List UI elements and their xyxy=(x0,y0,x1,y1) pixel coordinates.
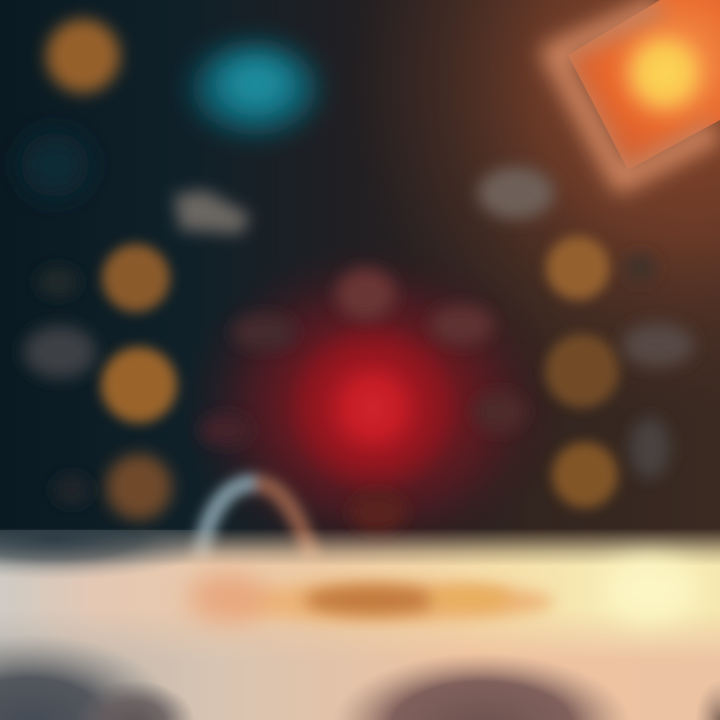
icon: top-left orange circle xyxy=(46,19,120,93)
streak left blob xyxy=(188,574,268,622)
text block: left label 3 xyxy=(54,476,90,504)
text block: right label 2 xyxy=(622,323,694,367)
diamond ring xyxy=(554,6,716,180)
ground lower body xyxy=(0,610,720,720)
central red burst xyxy=(200,268,526,532)
text block: right label 3 xyxy=(630,418,670,478)
diamond fill xyxy=(568,0,720,170)
icon: right circle 1 xyxy=(546,236,610,300)
ground upper body xyxy=(0,530,720,658)
icon: left circle 1 xyxy=(102,244,170,312)
icon: top teal circle xyxy=(193,42,317,134)
left grey cloud xyxy=(0,630,182,720)
orange streak on ground xyxy=(188,574,555,622)
icon: left circle 3 xyxy=(106,454,172,520)
text block: left label 1 xyxy=(38,268,78,296)
burst petals xyxy=(200,268,526,532)
right column: orange circles and labels xyxy=(545,236,694,508)
icon: right circle 2 xyxy=(545,334,619,408)
streak glow xyxy=(225,582,555,622)
left brown cloud xyxy=(75,680,195,720)
red core xyxy=(285,320,461,496)
dark clouds at the bottom xyxy=(0,630,720,720)
dark teal shadow at left edge of ground xyxy=(0,530,225,582)
text block: right label 1 xyxy=(624,254,656,282)
text block: blurred top-right label xyxy=(478,167,554,219)
arc above the ground xyxy=(200,483,312,560)
right corner cloud xyxy=(695,680,720,720)
text block: left label 2 xyxy=(24,326,96,378)
text block: blurred top-centre label xyxy=(174,190,250,234)
streak core xyxy=(304,585,512,615)
left column: orange circles and labels xyxy=(24,244,177,520)
icon: left circle 2 xyxy=(101,347,177,423)
icon: right circle 3 xyxy=(552,442,618,508)
icon: faint dark teal circle xyxy=(21,133,89,197)
diamond core xyxy=(615,23,715,123)
ground band xyxy=(0,528,720,720)
centre cloud xyxy=(332,652,632,720)
bright highlight on ground xyxy=(604,560,696,620)
icon: top-right glowing diamond xyxy=(554,0,720,180)
